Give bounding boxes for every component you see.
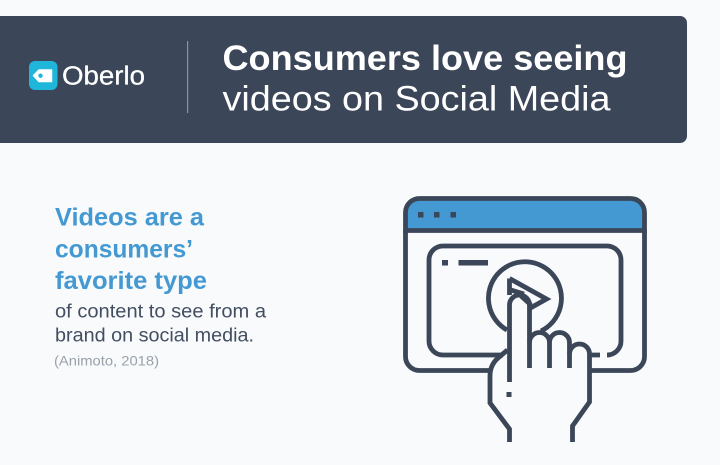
- supporting text: of content to see from a: [55, 302, 266, 323]
- hand: [490, 295, 590, 442]
- player controls: [442, 260, 488, 266]
- title: [222, 39, 628, 119]
- source citation: (Animoto, 2018): [54, 353, 159, 369]
- supporting text: [55, 302, 266, 347]
- title: videos on Social Media: [222, 80, 611, 119]
- video player frame: [429, 246, 621, 355]
- highlighted statement: favorite type: [55, 267, 207, 295]
- title: Consumers love seeing: [222, 39, 628, 78]
- highlighted statement: consumers’: [55, 236, 193, 264]
- browser window frame: [406, 230, 644, 370]
- play button circle: [488, 262, 561, 331]
- browser title bar: [406, 198, 644, 230]
- highlighted statement: Videos are a: [55, 204, 205, 232]
- header banner: [0, 16, 687, 143]
- highlighted statement: [55, 204, 207, 295]
- icon: browser window with hand pressing play: [406, 198, 644, 442]
- icon: price tag: [29, 61, 58, 90]
- Oberlo logo: [29, 61, 145, 90]
- supporting text: brand on social media.: [55, 326, 254, 347]
- play triangle: [510, 278, 546, 308]
- logo wordmark: Oberlo: [62, 62, 145, 90]
